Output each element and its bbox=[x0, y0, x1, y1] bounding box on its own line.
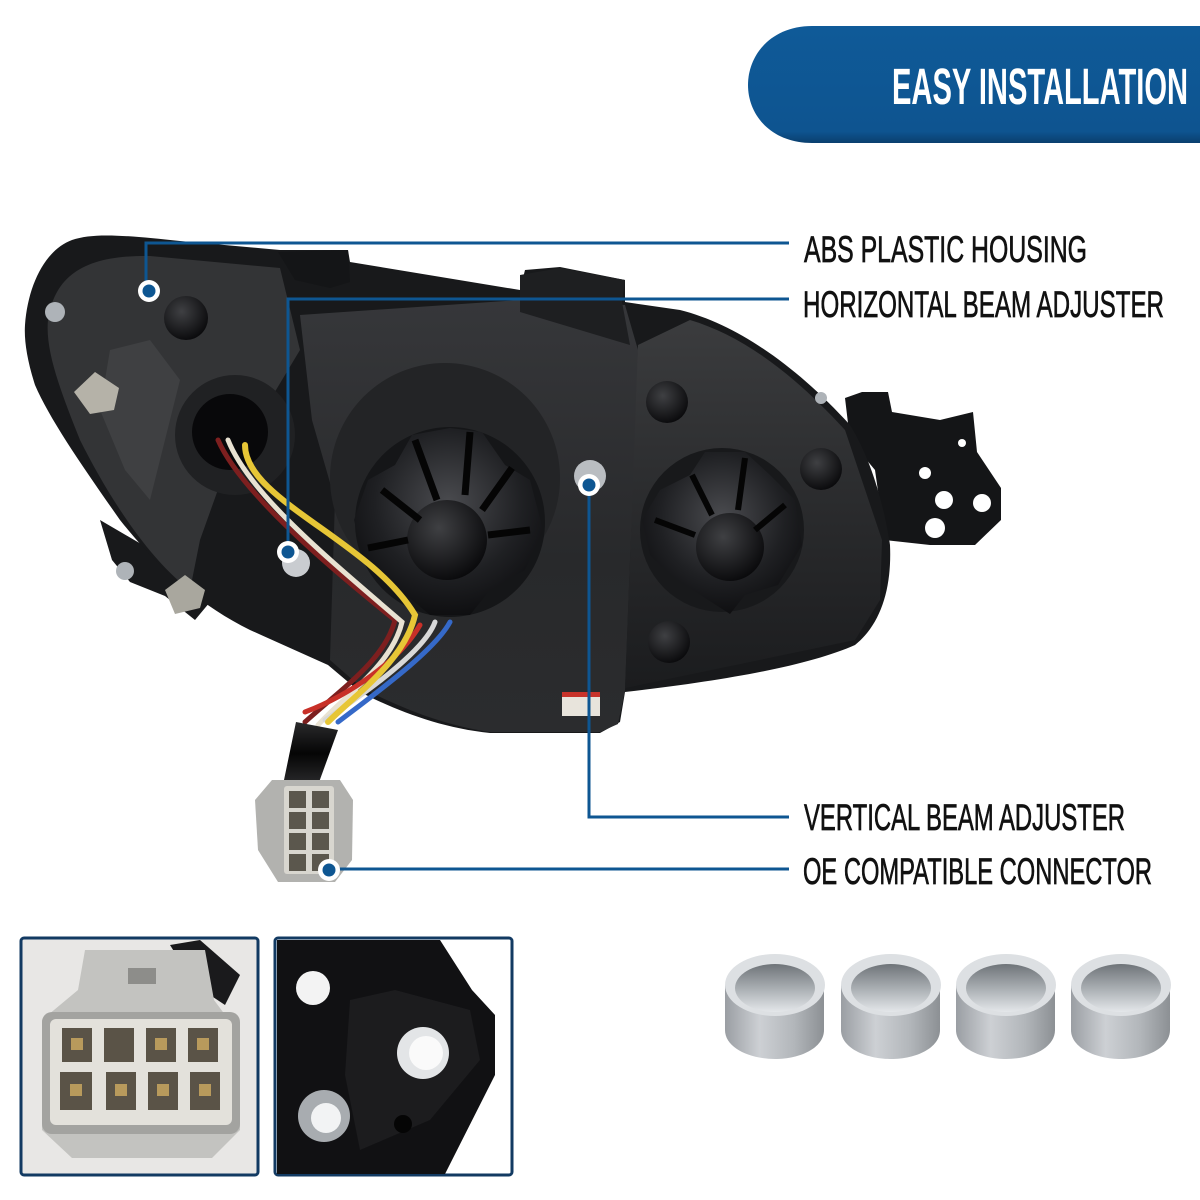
spacer 1 bbox=[725, 954, 825, 1059]
left bulb socket bbox=[175, 375, 295, 495]
spacer 3 bbox=[956, 954, 1056, 1059]
callout: OE compatible connector bbox=[318, 851, 1152, 892]
top tab bbox=[278, 250, 350, 288]
title banner bbox=[748, 26, 1200, 143]
spacer 4 bbox=[1071, 954, 1171, 1059]
QC sticker bbox=[562, 692, 600, 716]
spacer 2 bbox=[841, 954, 941, 1059]
screws and bolts bbox=[45, 302, 65, 322]
callout: ABS plastic housing bbox=[138, 229, 1087, 302]
screw tabs bbox=[100, 520, 220, 620]
detail panel: bracket close-up bbox=[275, 938, 512, 1175]
housing body bbox=[25, 235, 890, 733]
large adjuster dome bbox=[330, 363, 560, 593]
central box bbox=[300, 300, 638, 732]
mounting bracket bbox=[845, 392, 1001, 545]
detail panel: connector close-up bbox=[21, 938, 258, 1175]
metal spacers bbox=[725, 954, 1171, 1059]
wire loom bbox=[284, 722, 338, 785]
callout: horizontal beam adjuster bbox=[277, 284, 1164, 563]
small adjuster dome bbox=[640, 448, 804, 612]
headlight assembly rear view bbox=[25, 235, 1001, 785]
wires bbox=[218, 440, 450, 725]
rubber plugs bbox=[164, 296, 208, 340]
connector on harness bbox=[255, 780, 353, 882]
callout: vertical beam adjuster bbox=[578, 474, 1125, 838]
